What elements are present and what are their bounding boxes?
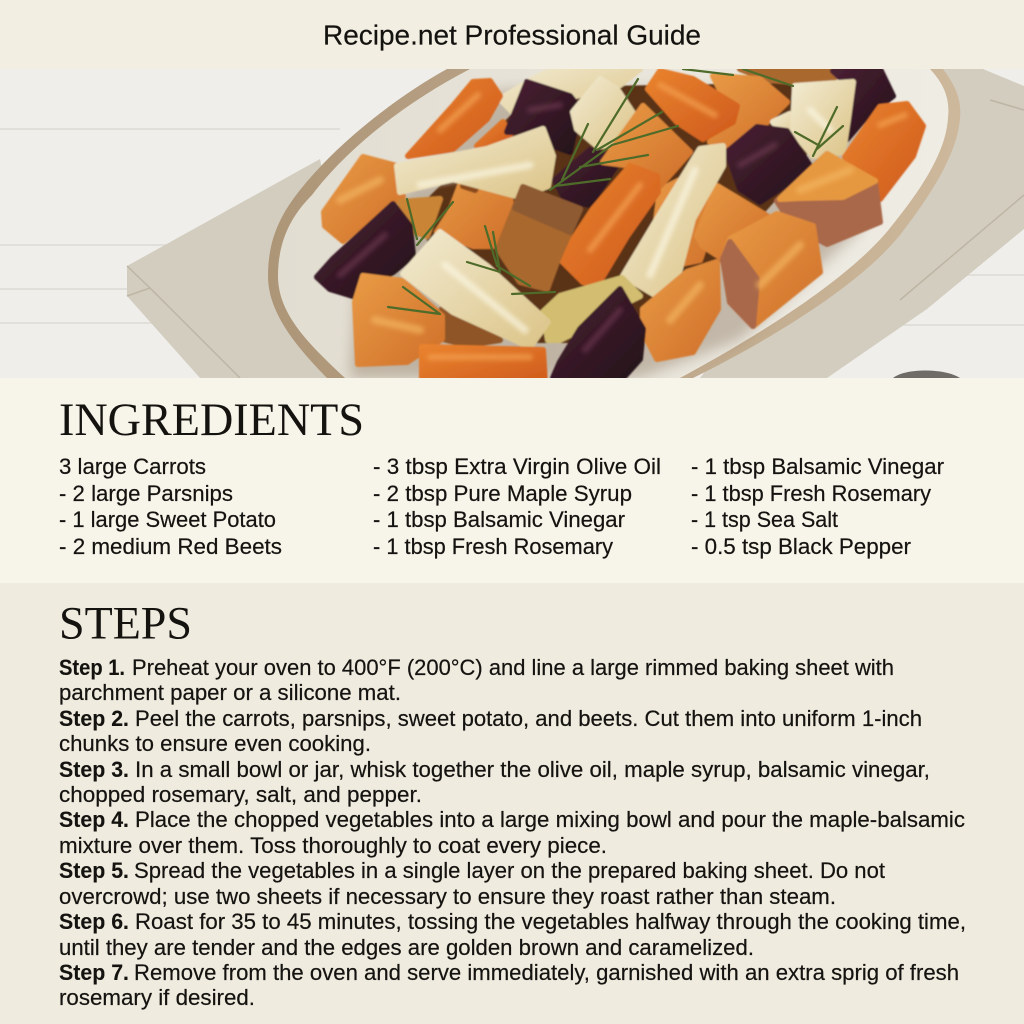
parsnip top large [397,129,553,197]
platter [268,69,960,378]
napkin [127,69,1024,378]
parsnip right [793,82,853,156]
vegetable highlights [340,85,905,357]
tall parsnip [623,146,723,296]
steps text: chopped rosemary, salt, and pepper. [59,782,422,807]
steps text: Step 2. [59,706,129,731]
ingredients column 2: - 3 tbsp Extra Virgin Olive Oil [373,454,661,479]
steps text: chunks to ensure even cooking. [59,731,371,756]
ingredients column 3: - 1 tbsp Fresh Rosemary [691,481,932,506]
ingredients column 1: - 2 large Parsnips [59,481,233,506]
big sweet potato [723,214,820,326]
header band [0,0,1024,69]
parsnip small right [768,110,792,131]
steps text: Step 5. [59,858,129,883]
steps text: Step 1. [59,655,125,680]
carrot centre [560,166,658,286]
ingredients column 1: 3 large Carrots [59,454,206,479]
carrot right [845,104,923,199]
ingredients column 1 [59,454,282,559]
ingredients column 3: - 1 tsp Sea Salt [691,507,839,532]
sweet potato with skin [777,154,880,244]
ingredients column 3 [691,454,944,559]
carrot top [648,71,737,139]
parsnip mid [403,232,548,347]
spoon handle [893,370,960,378]
header title: Recipe.net Professional Guide [323,20,701,50]
top parsnip and back pieces [500,69,640,120]
ingredients heading: INGREDIENTS [59,395,364,446]
small sweet behind [400,199,440,236]
steps text: until they are tender and the edges are golden brown and caramelized. [59,935,754,960]
sweet bottom [643,262,718,359]
steps text: Spread the vegetables in a single layer on the prepared baking sheet. Do not [134,858,885,883]
steps text: Roast for 35 to 45 minutes, tossing the vegetables halfway through the cooking time, [135,909,966,934]
steps text [59,655,966,1010]
beet bottom [553,289,643,378]
steps text: Step 3. [59,757,129,782]
steps text: overcrowd; use two sheets if necessary to ensure they roast rather than steam. [59,884,836,909]
steps text: Preheat your oven to 400°F (200°C) and line a large rimmed baking sheet with [132,655,894,680]
ingredients column 3: - 1 tbsp Balsamic Vinegar [691,454,944,479]
ingredients column 2: - 2 tbsp Pure Maple Syrup [373,481,632,506]
parsnip golden [543,278,640,340]
sweet potato top [710,76,787,146]
ingredients panel [0,378,1024,583]
sweet potato mid [697,186,767,259]
steps text: Step 7. [59,960,129,985]
ingredients column 1: - 2 medium Red Beets [59,534,282,559]
small brown [442,309,500,345]
vegetables [317,69,923,384]
ingredients column 2 [373,454,661,559]
carrot top left [408,81,500,156]
beet top [507,82,580,152]
ingredients column 3: - 0.5 tsp Black Pepper [691,534,911,559]
ingredients column 2: - 1 tbsp Fresh Rosemary [373,534,614,559]
brown sweet [498,187,580,289]
sweet front [355,276,442,364]
sweet left [324,157,403,241]
rosemary sprigs [388,69,843,314]
ingredients column 2: - 1 tbsp Balsamic Vinegar [373,507,625,532]
filler sweet potato pieces [652,176,710,268]
beet left [317,204,413,296]
sweet potato centre [603,106,690,186]
parsnip back centre [573,79,637,146]
beet middle [727,127,810,202]
beet behind sprig [555,150,620,205]
steps heading: STEPS [59,598,192,650]
steps text: Step 6. [59,909,129,934]
steps text: mixture over them. Toss thoroughly to coat every piece. [59,833,607,858]
cup [205,69,337,95]
steps panel [0,583,1024,1024]
gaps between vegetables [430,85,840,340]
beet far right [833,69,893,139]
steps text: rosemary if desired. [59,985,255,1010]
photo: roasted root vegetables on a platter [0,69,1024,384]
steps text: Peel the carrots, parsnips, sweet potato, and beets. Cut them into uniform 1-inch [135,706,922,731]
steps text: Step 4. [59,807,129,832]
food shadow [350,90,880,378]
steps text: parchment paper or a silicone mat. [59,680,401,705]
steps text: In a small bowl or jar, whisk together the olive oil, maple syrup, balsamic vinegar, [135,757,930,782]
steps text: Remove from the oven and serve immediately, garnished with an extra sprig of fresh [134,960,959,985]
sweet second [437,167,512,246]
ingredients column 1: - 1 large Sweet Potato [59,507,276,532]
steps text: Place the chopped vegetables into a large mixing bowl and pour the maple-balsamic [135,807,965,832]
carrot bottom [422,347,545,384]
